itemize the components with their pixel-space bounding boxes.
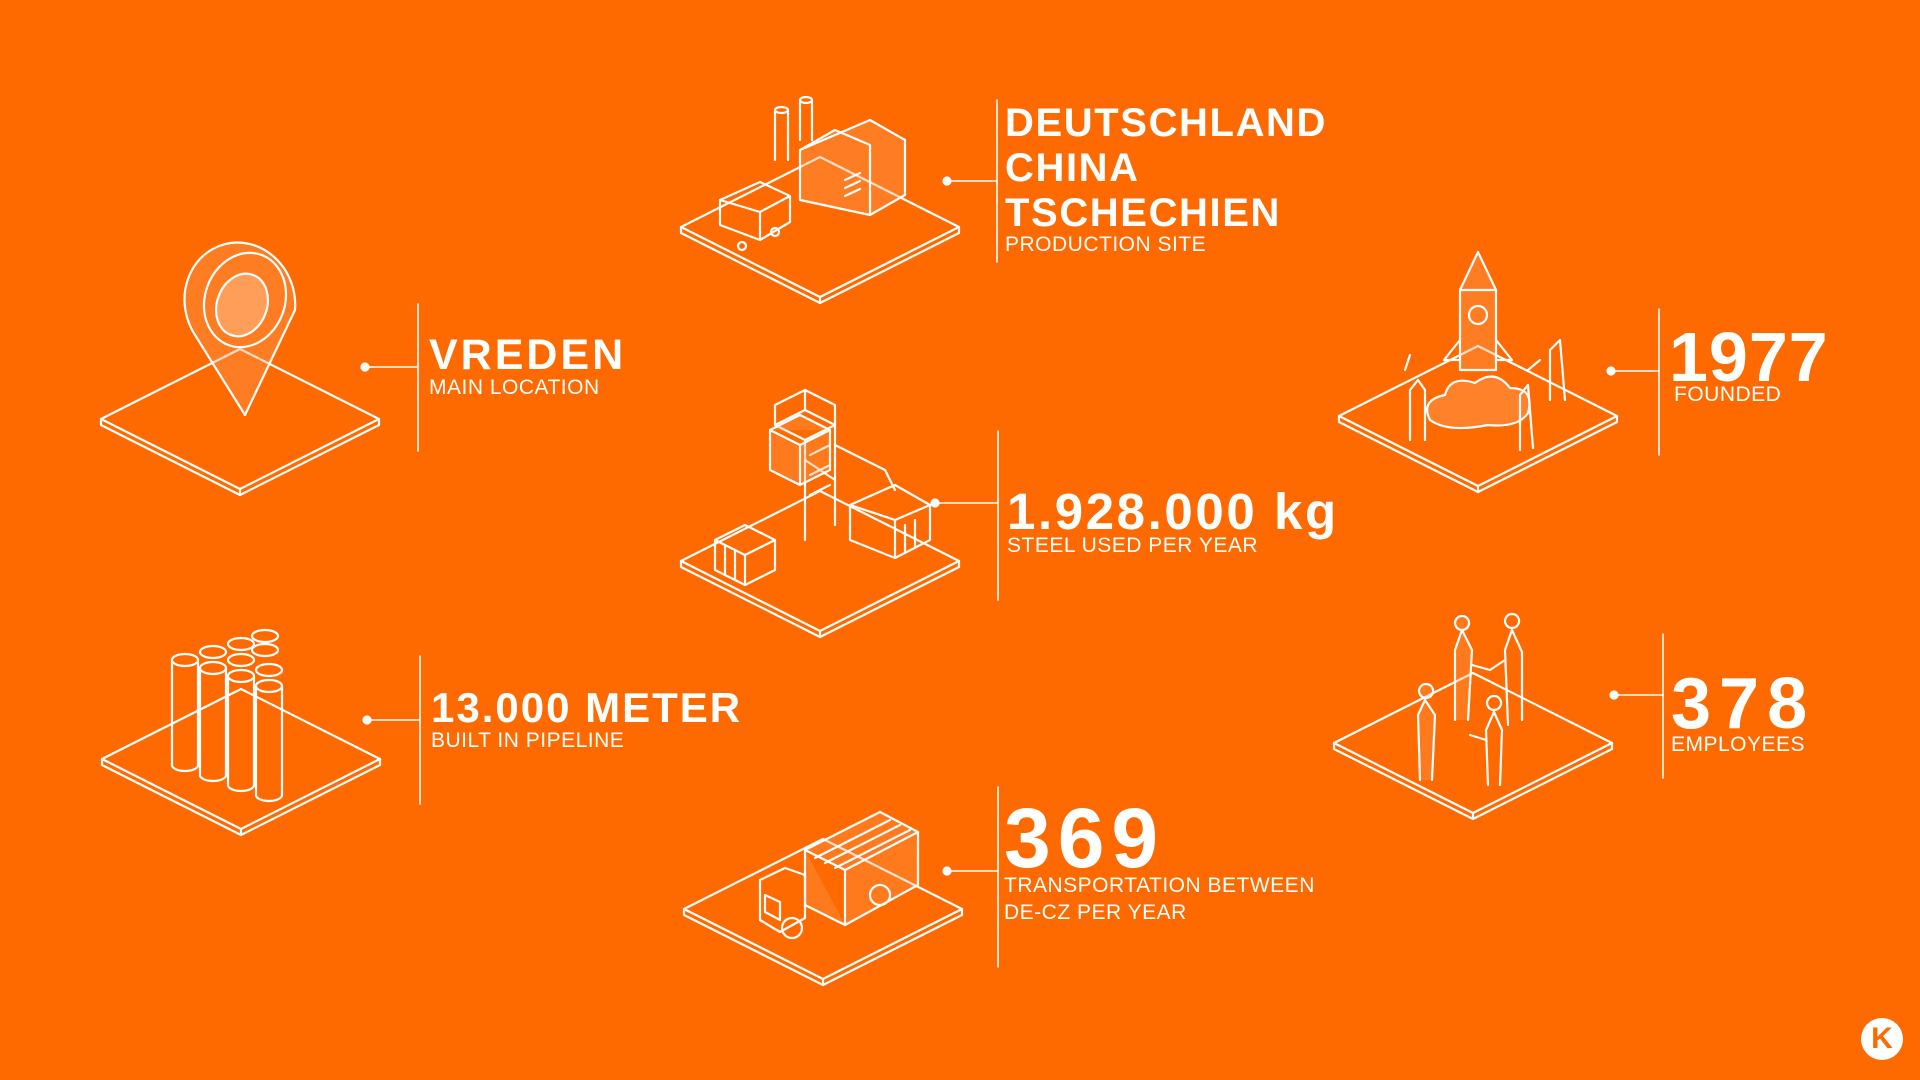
icon: employees — [1334, 614, 1612, 819]
icon: steel structure — [681, 390, 959, 637]
text: pipeline: BUILT IN PIPELINE — [431, 729, 624, 752]
connector: vreden — [362, 304, 418, 451]
text: production site: PRODUCTION SITE — [1005, 233, 1206, 256]
connector: pipeline — [364, 656, 420, 804]
icon: pipes — [102, 630, 380, 835]
text: employees: 378 — [1671, 664, 1815, 744]
text: steel: STEEL USED PER YEAR — [1007, 534, 1258, 557]
text: production site — [1005, 101, 1327, 256]
logo — [1861, 1018, 1903, 1060]
connector: founded — [1608, 309, 1659, 455]
text: transport — [1004, 791, 1315, 924]
text: vreden: MAIN LOCATION — [429, 376, 600, 399]
text: transport: TRANSPORTATION BETWEEN — [1004, 874, 1315, 897]
text: founded: 1977 — [1669, 318, 1829, 396]
text: founded: FOUNDED — [1674, 383, 1781, 406]
text: transport: 369 — [1004, 791, 1165, 885]
text: production site: DEUTSCHLAND — [1005, 101, 1327, 145]
text: employees: EMPLOYEES — [1671, 733, 1805, 756]
text: production site: CHINA — [1005, 146, 1140, 190]
icon: location pin — [101, 241, 379, 495]
connector: employees — [1610, 634, 1663, 778]
connector: production — [944, 100, 997, 262]
text: vreden: VREDEN — [429, 331, 626, 379]
logo: K — [1871, 1022, 1893, 1055]
text: transport: DE-CZ PER YEAR — [1004, 901, 1187, 924]
text: production site: TSCHECHIEN — [1005, 191, 1281, 235]
text: pipeline — [431, 684, 742, 752]
text: steel: 1.928.000 kg — [1007, 483, 1339, 540]
icon: rocket launch — [1339, 252, 1617, 492]
text: pipeline: 13.000 METER — [431, 684, 742, 731]
connector: steel — [932, 431, 998, 600]
icon: production site — [681, 97, 959, 303]
icon: truck — [684, 812, 962, 985]
connector: transport — [944, 787, 998, 967]
